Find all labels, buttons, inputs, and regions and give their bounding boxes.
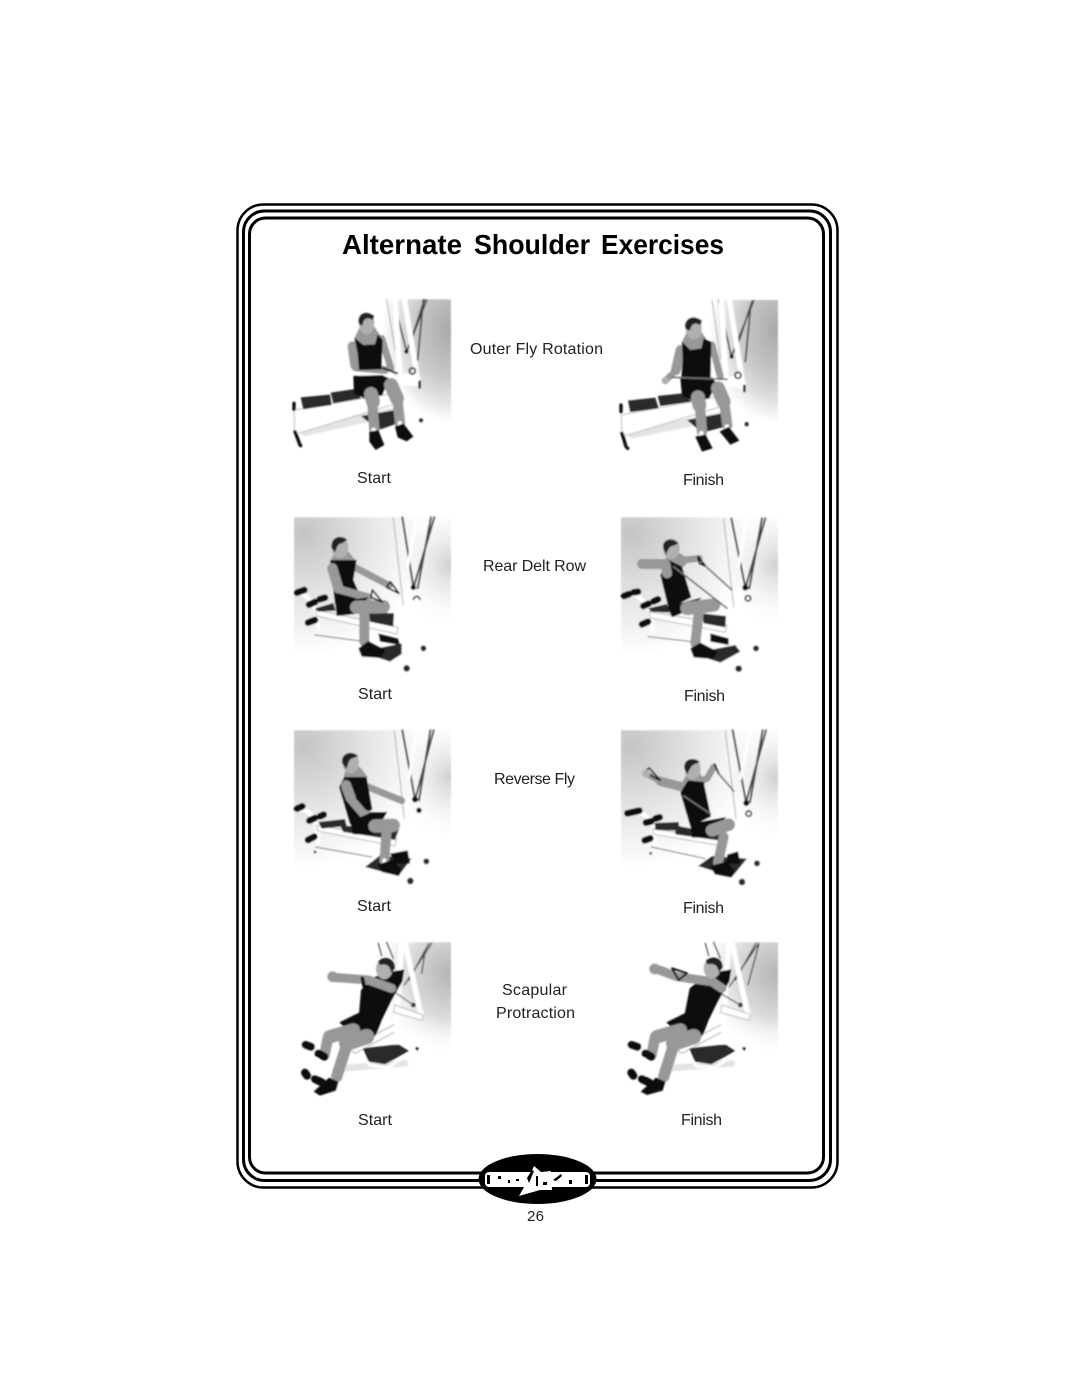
labels: row 1 start and finish: Start — [357, 470, 392, 487]
photo: scapular protraction start — [294, 942, 451, 1100]
triple-line rounded frame — [238, 204, 838, 1188]
labels: row 4 start and finish — [358, 1112, 722, 1129]
logo badge — [478, 1154, 596, 1204]
labels: row 1 start and finish — [357, 470, 724, 489]
photo: rear delt row finish — [621, 517, 778, 675]
title — [342, 229, 724, 260]
label: scapular protraction: Scapular — [502, 982, 568, 999]
photo: rear delt row start — [294, 517, 451, 675]
photo: outer fly rotation start — [294, 299, 451, 450]
label: scapular protraction: Protraction — [496, 1005, 575, 1022]
label: reverse fly: Reverse Fly — [494, 771, 575, 788]
photo: reverse fly finish — [621, 730, 778, 887]
photo: reverse fly start — [294, 730, 451, 887]
labels: row 1 start and finish: Finish — [683, 472, 724, 489]
title: Exercises — [601, 229, 724, 260]
title: Alternate — [342, 229, 462, 260]
labels: row 2 start and finish: Start — [358, 686, 393, 703]
labels: row 4 start and finish: Start — [358, 1112, 393, 1129]
labels: row 3 start and finish: Start — [357, 898, 392, 915]
labels: row 3 start and finish: Finish — [683, 900, 724, 917]
labels: row 3 start and finish — [357, 898, 724, 917]
label: rear delt row: Rear Delt Row — [483, 558, 586, 575]
label: outer fly rotation: Outer Fly Rotation — [470, 341, 603, 358]
title: Shoulder — [474, 229, 590, 260]
photo: outer fly rotation finish — [621, 300, 778, 452]
labels: row 4 start and finish: Finish — [681, 1112, 722, 1129]
labels: row 2 start and finish: Finish — [684, 688, 725, 705]
photo: scapular protraction finish — [621, 942, 778, 1100]
label: scapular protraction — [496, 982, 575, 1022]
page number: 26 — [527, 1208, 544, 1225]
labels: row 2 start and finish — [358, 686, 725, 705]
